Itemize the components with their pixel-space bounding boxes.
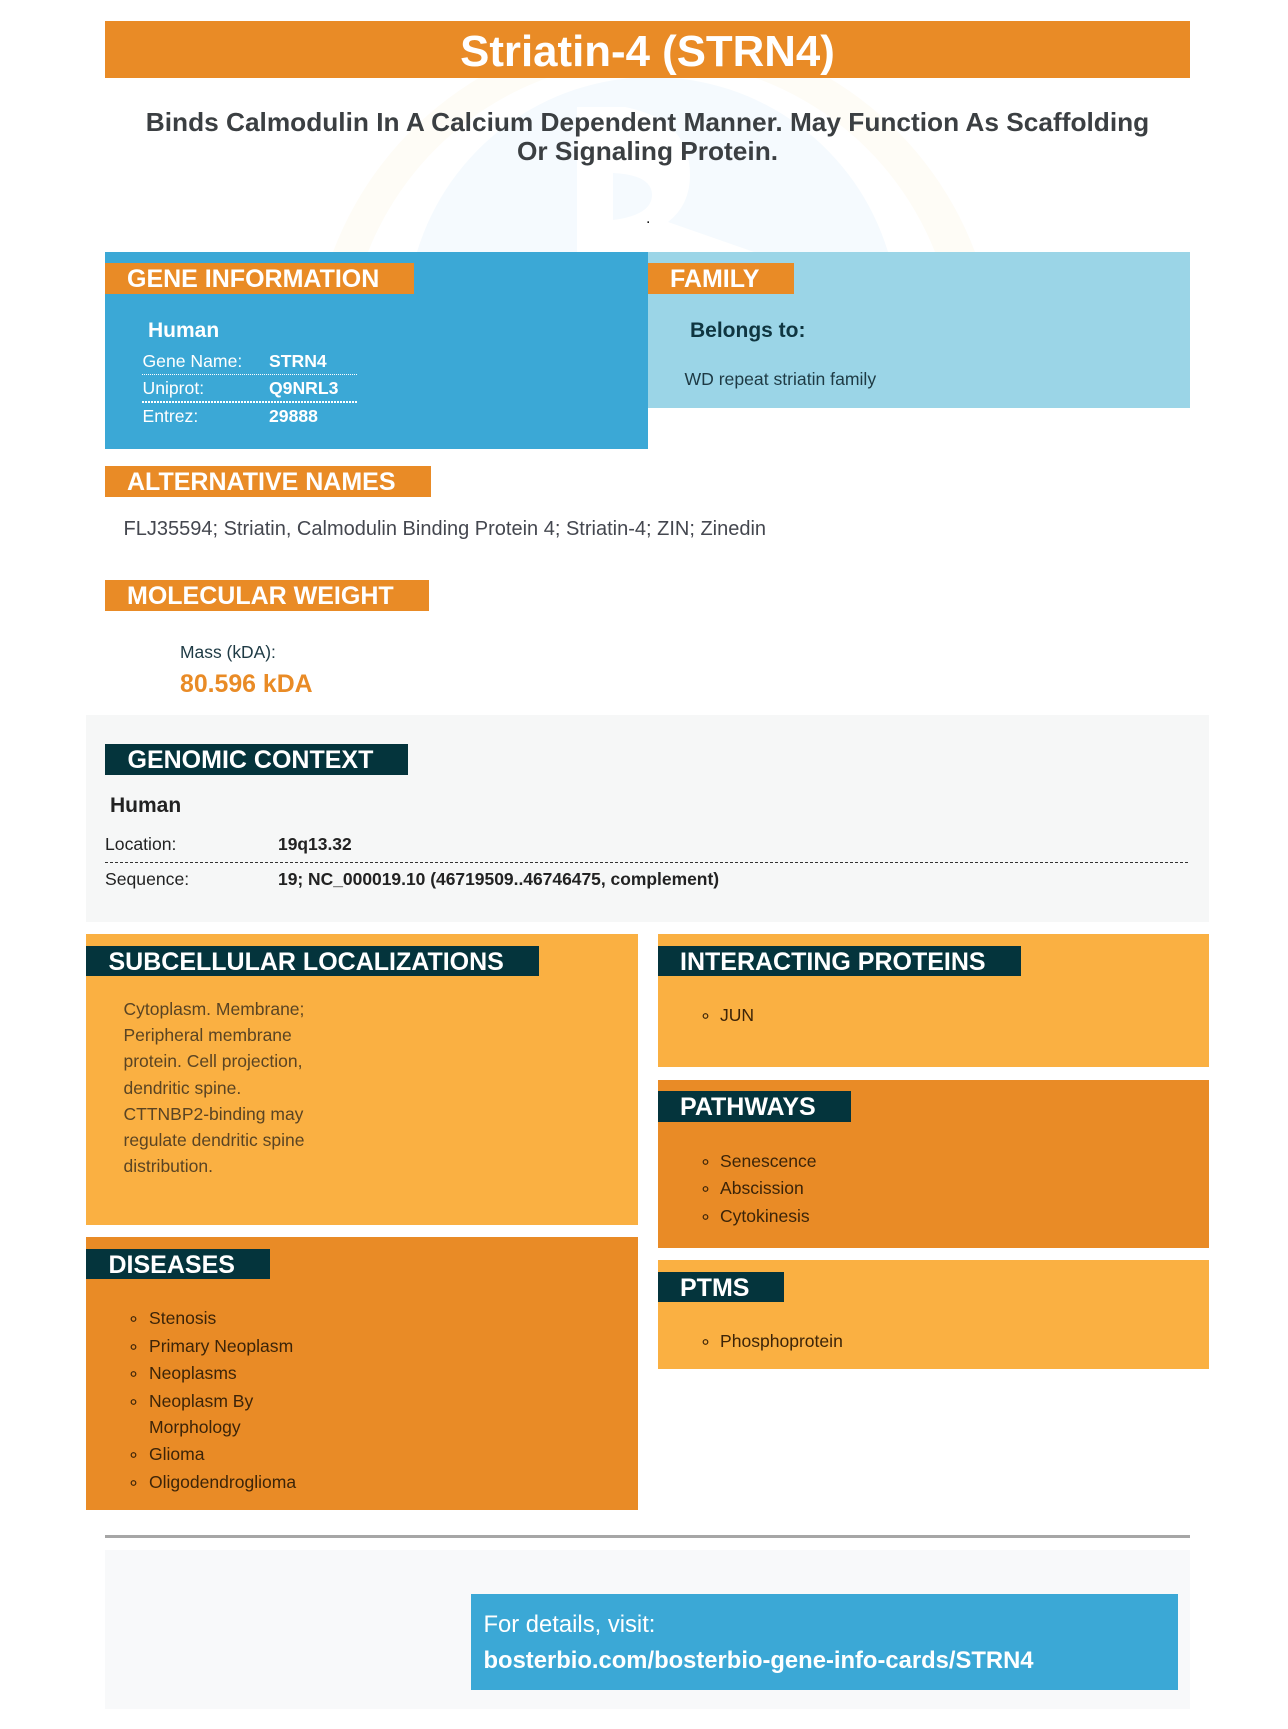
heading: family: FAMILY [670, 265, 760, 293]
panel: ptms [658, 1260, 1209, 1369]
sequence row: Sequence: [105, 869, 189, 889]
panel: interacting proteins [658, 934, 1209, 1067]
section: alternative names [105, 466, 766, 540]
title banner: Striatin-4 (STRN4) [460, 27, 835, 76]
alternative names text: FLJ35594; Striatin, Calmodulin Binding Protein 4; Striatin-4; ZIN; Zinedin [124, 518, 766, 540]
diseases list: Primary Neoplasm [149, 1336, 293, 1356]
interacting proteins list: JUN [720, 1005, 754, 1025]
heading: pathways: PATHWAYS [680, 1093, 816, 1121]
pathways list: Abscission [720, 1178, 804, 1198]
heading: family [648, 263, 794, 294]
family value: WD repeat striatin family [684, 369, 876, 389]
heading: diseases [86, 1249, 270, 1279]
heading: molecular weight: MOLECULAR WEIGHT [127, 582, 394, 610]
diseases list: Neoplasms [149, 1363, 237, 1383]
subtitle: Binds Calmodulin In A Calcium Dependent Manner. May Function As Scaffolding [146, 107, 1149, 137]
panel: diseases [86, 1237, 638, 1510]
interacting proteins list [703, 1005, 754, 1025]
diseases list: Neoplasm By [149, 1391, 253, 1411]
callout: details link: bosterbio.com/bosterbio-gene-info-cards/STRN4 [484, 1647, 1034, 1674]
localization text: protein. Cell projection, [124, 1051, 302, 1071]
localization text: Cytoplasm. Membrane; [124, 999, 304, 1019]
gene identifiers table: STRN4 [269, 351, 327, 371]
callout: details link [471, 1594, 1178, 1690]
localization text: distribution. [124, 1156, 213, 1176]
mass label: Mass (kDA): [180, 642, 276, 662]
species label: Human [110, 794, 181, 817]
heading: ptms [658, 1272, 784, 1302]
pathways list: Cytokinesis [720, 1206, 810, 1226]
diseases list [131, 1308, 296, 1492]
localization text: dendritic spine. [124, 1078, 241, 1098]
location row: 19q13.32 [278, 834, 352, 854]
panel: family [648, 252, 1190, 408]
gene identifiers table: Gene Name: [142, 351, 242, 371]
heading: interacting proteins: INTERACTING PROTEINS [680, 948, 986, 976]
heading: alternative names: ALTERNATIVE NAMES [127, 468, 396, 496]
location row [105, 834, 352, 854]
small dot text: . [646, 210, 650, 227]
subtitle [146, 107, 1149, 166]
subtitle: Or Signaling Protein. [517, 136, 778, 166]
gene identifiers table [142, 351, 357, 426]
gene identifiers table: Entrez: [142, 406, 198, 426]
pathways list: Senescence [720, 1151, 816, 1171]
diseases list: Stenosis [149, 1308, 216, 1328]
localization text: regulate dendritic spine [124, 1130, 304, 1150]
ptms list: Phosphoprotein [720, 1331, 843, 1351]
pathways list [703, 1151, 816, 1226]
localization text: CTTNBP2-binding may [124, 1104, 304, 1124]
location row: Location: [105, 834, 176, 854]
heading: diseases: DISEASES [108, 1251, 235, 1279]
belongs to label: Belongs to: [690, 319, 806, 342]
gene identifiers table: Uniprot: [142, 378, 204, 398]
panel: subcellular localizations [86, 934, 638, 1225]
panel: pathways [658, 1080, 1209, 1248]
gene identifiers table: 29888 [269, 406, 318, 426]
localization text [124, 999, 304, 1176]
sequence row: 19; NC_000019.10 (46719509..46746475, complement) [278, 869, 719, 889]
diseases list: Glioma [149, 1444, 205, 1464]
heading: subcellular localizations: SUBCELLULAR LOCALIZATIONS [108, 948, 504, 976]
gene identifiers table: Q9NRL3 [269, 378, 339, 398]
heading: ptms: PTMS [680, 1274, 749, 1302]
panel: genomic context [86, 715, 1209, 922]
panel: gene information [105, 252, 648, 449]
localization text: Peripheral membrane [124, 1025, 292, 1045]
heading: pathways [658, 1091, 851, 1122]
watermark logo [333, 30, 975, 252]
diseases list: Morphology [149, 1417, 241, 1437]
diseases list: Oligodendroglioma [149, 1472, 296, 1492]
mass value: 80.596 kDA [180, 671, 313, 698]
heading: gene information: GENE INFORMATION [127, 265, 379, 293]
title banner [105, 21, 1190, 78]
panel: footer [105, 1550, 1190, 1709]
callout: details link: For details, visit: [484, 1611, 655, 1638]
species label: Human [148, 319, 219, 342]
section: molecular weight [105, 580, 429, 698]
heading: genomic context: GENOMIC CONTEXT [128, 746, 373, 774]
